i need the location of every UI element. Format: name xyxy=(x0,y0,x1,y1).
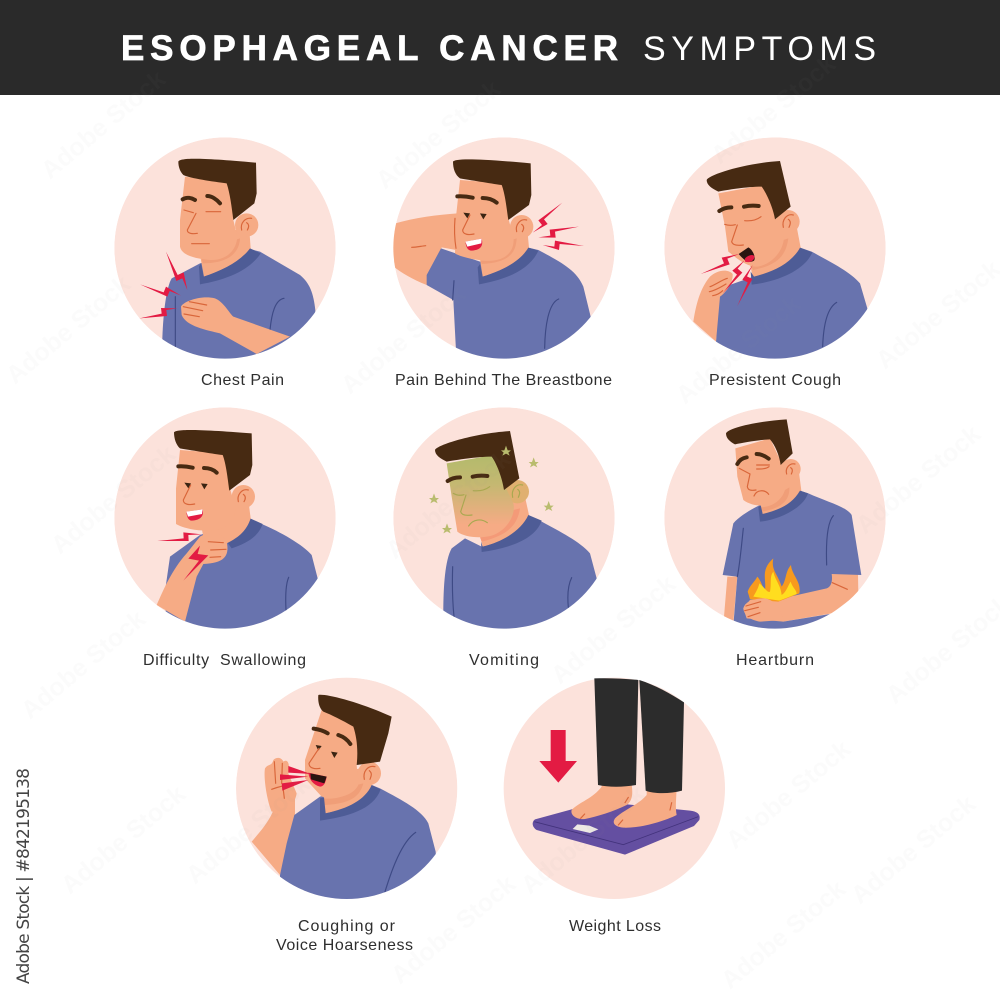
watermark: Adobe Stock xyxy=(381,445,516,565)
feet xyxy=(571,785,632,819)
panel: vomiting xyxy=(393,407,615,669)
watermark: Adobe Stock xyxy=(16,605,151,725)
cough bolts xyxy=(701,254,753,306)
label: coughing or voice hoarseness: Voice Hoarseness xyxy=(276,937,413,954)
label: persistent cough: Presistent Cough xyxy=(709,372,841,389)
label: coughing or voice hoarseness xyxy=(276,918,413,954)
panel: pain behind the breastbone xyxy=(390,137,615,389)
watermark: Adobe Stock xyxy=(721,735,856,855)
label: weight loss: Weight Loss xyxy=(569,918,661,935)
label: chest pain: Chest Pain xyxy=(201,372,284,389)
title: ESOPHAGEAL CANCER xyxy=(121,29,618,68)
watermark: Adobe Stock xyxy=(371,75,506,195)
illustration: nauseous man xyxy=(393,407,615,633)
watermark: Adobe Stock xyxy=(1,270,136,390)
watermark: Adobe Stock xyxy=(706,50,841,170)
watermark: Adobe Stock xyxy=(546,570,681,690)
subtitle: SYMPTOMS xyxy=(643,30,876,68)
panel: coughing or voice hoarseness xyxy=(236,678,457,954)
panel: chest pain xyxy=(114,137,336,389)
pain bolts xyxy=(533,203,584,250)
dizzy stars xyxy=(429,446,554,533)
flames xyxy=(748,558,800,602)
illustration: man coughing with hand at mouth xyxy=(236,678,457,903)
illustration: man holding throat xyxy=(114,407,336,633)
label: pain behind the breastbone: Pain Behind The Breastbone xyxy=(395,372,612,389)
panel: difficulty swallowing xyxy=(114,407,336,669)
panel: heartburn xyxy=(664,407,886,669)
label: heartburn: Heartburn xyxy=(736,652,814,669)
watermark: Adobe Stock xyxy=(716,875,851,995)
pain bolts xyxy=(139,252,187,318)
illustration: man holding chest xyxy=(114,137,336,363)
bathroom scale xyxy=(533,802,700,855)
label: vomiting: Vomiting xyxy=(469,652,539,669)
throat bolts xyxy=(157,532,208,581)
watermark: Adobe Stock xyxy=(851,420,986,540)
watermark: Adobe Stock xyxy=(36,65,171,185)
header bar xyxy=(0,0,1000,95)
panel: weight loss xyxy=(504,678,725,935)
illustration: man holding neck xyxy=(390,137,615,363)
panel: persistent cough xyxy=(664,137,886,389)
watermark: Adobe Stock xyxy=(181,770,316,890)
watermark: Adobe Stock xyxy=(671,290,806,410)
label: coughing or voice hoarseness: Coughing or xyxy=(298,918,396,935)
cough bolts xyxy=(280,766,311,791)
illustration: feet on scale with down arrow xyxy=(504,678,725,899)
watermark: Adobe Stock xyxy=(386,870,521,990)
watermark: Adobe Stock xyxy=(846,790,981,910)
watermark: Adobe Stock xyxy=(516,780,651,900)
watermark: Adobe Stock xyxy=(46,440,181,560)
label: difficulty swallowing: Difficulty Swallowing xyxy=(143,652,306,669)
illustration: man coughing into fist xyxy=(664,137,886,363)
arrow down xyxy=(539,730,577,783)
illustration: man with flames on stomach xyxy=(664,407,886,633)
watermark: Adobe Stock xyxy=(56,780,191,900)
trouser legs xyxy=(594,678,638,787)
watermark: Adobe Stock xyxy=(336,280,471,400)
stock id side text: Adobe Stock | #842195138 xyxy=(14,768,34,984)
